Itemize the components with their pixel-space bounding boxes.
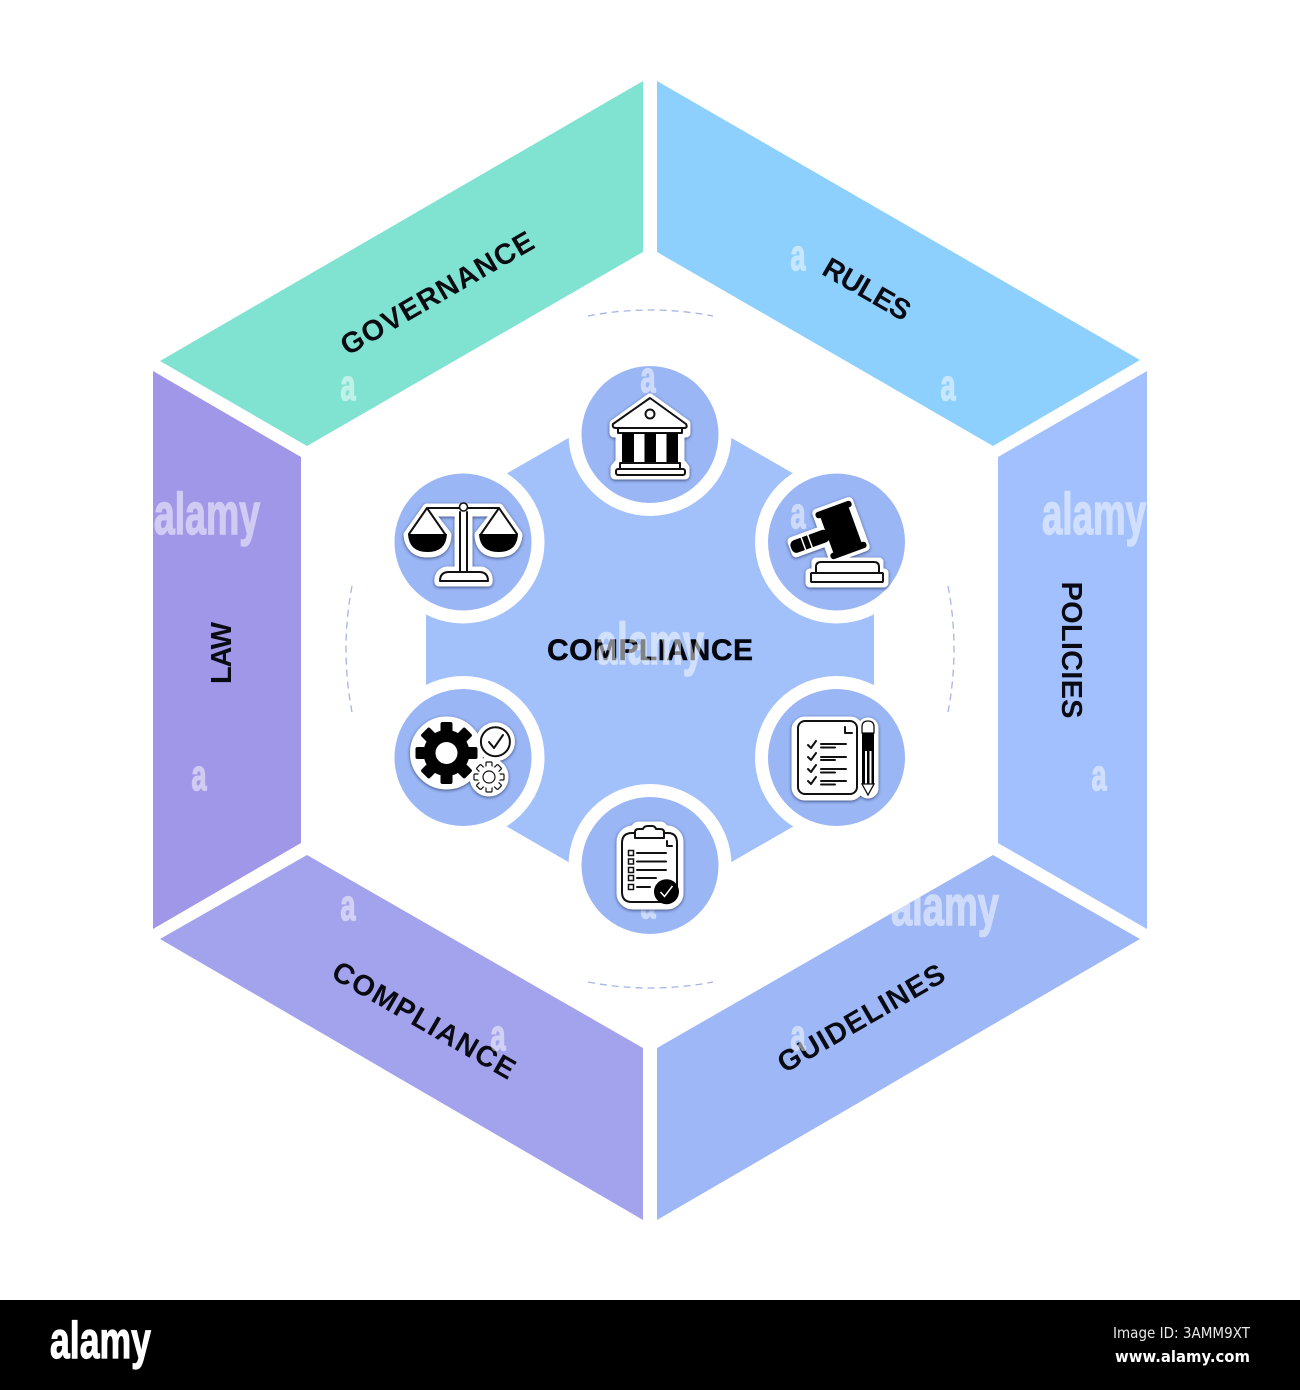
icon: document and pencil bbox=[796, 721, 874, 796]
alamy watermarks: a bbox=[640, 353, 656, 402]
alamy watermarks: a bbox=[340, 881, 356, 930]
icon: gavel bbox=[783, 500, 884, 583]
label: compliance: COMPLIANCE bbox=[326, 956, 521, 1086]
alamy watermarks: alamy bbox=[154, 482, 260, 547]
icon circles bbox=[382, 353, 918, 947]
alamy watermarks: a bbox=[340, 361, 356, 410]
central hexagon bbox=[426, 391, 874, 909]
alamy watermarks bbox=[154, 231, 1146, 1060]
icon: clipboard checklist bbox=[621, 826, 679, 905]
alamy watermarks: a bbox=[192, 751, 207, 800]
panel: governance bbox=[160, 81, 643, 446]
alamy watermarks: alamy bbox=[1042, 482, 1146, 547]
icon: courthouse bbox=[613, 398, 687, 475]
label: policies: POLICIES bbox=[1055, 582, 1087, 718]
panel: guidelines bbox=[657, 855, 1140, 1220]
alamy watermarks: a bbox=[1092, 751, 1107, 800]
label: rules: RULES bbox=[817, 252, 916, 328]
panel: law bbox=[153, 371, 301, 929]
panel: rules bbox=[657, 81, 1140, 446]
alamy watermarks: a bbox=[490, 1011, 506, 1060]
alamy watermarks: alamy bbox=[596, 612, 704, 677]
footer bar bbox=[0, 1300, 1300, 1390]
panel: compliance bbox=[160, 855, 643, 1220]
watermark behind clipboard: a bbox=[640, 879, 656, 928]
icon: gears with check bbox=[414, 721, 510, 792]
label: law: LAW bbox=[206, 621, 238, 684]
footer logo: alamy bbox=[50, 1312, 151, 1370]
label: guidelines: GUIDELINES bbox=[772, 958, 951, 1080]
label: governance: GOVERNANCE bbox=[335, 226, 540, 362]
alamy watermarks: a bbox=[940, 361, 956, 410]
footer image id: Image ID: 3AMM9XT bbox=[1113, 1324, 1251, 1342]
alamy watermarks: a bbox=[790, 1011, 806, 1060]
alamy watermarks: a bbox=[790, 231, 806, 280]
footer url: www.alamy.com bbox=[1115, 1347, 1250, 1366]
center title: COMPLIANCE bbox=[547, 634, 753, 667]
alamy watermarks: alamy bbox=[891, 874, 999, 937]
alamy watermarks: a bbox=[790, 489, 806, 538]
panel: policies bbox=[998, 371, 1147, 929]
dashed arcs bbox=[346, 310, 954, 988]
icon: scales bbox=[408, 503, 518, 582]
